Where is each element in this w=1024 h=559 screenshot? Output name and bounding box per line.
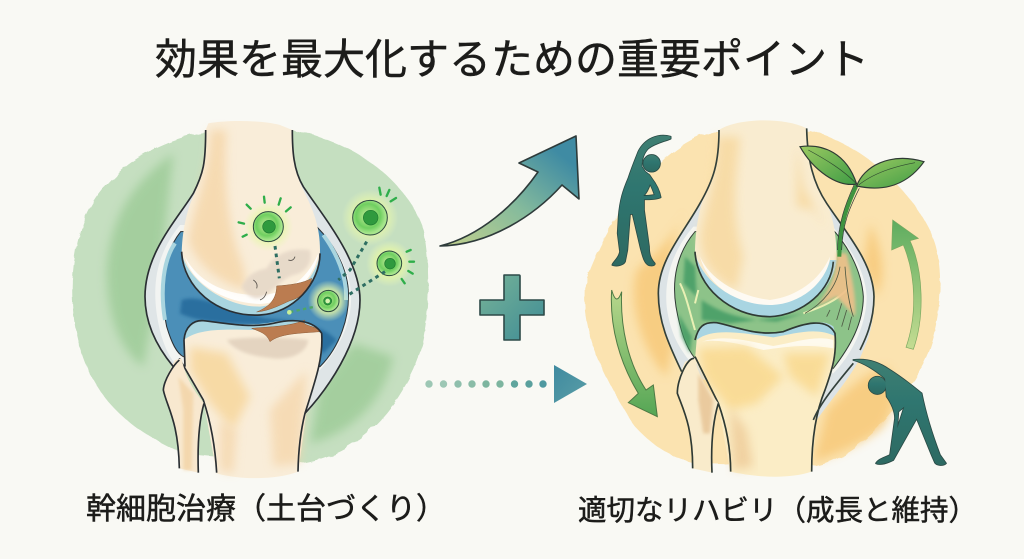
capsule outline <box>658 128 874 420</box>
tibia <box>695 322 836 477</box>
fibula <box>163 358 204 473</box>
label: stem cell therapy: 幹細胞治療（土台づくり） <box>86 493 446 526</box>
synovial fluid <box>163 227 349 367</box>
title: 効果を最大化するための重要ポイント <box>155 36 869 83</box>
joint fluid and capsule fill <box>658 128 874 420</box>
capsule outline <box>145 130 360 413</box>
arrow: upward green <box>892 220 921 349</box>
yellow watercolor blob <box>585 131 940 467</box>
stem cells <box>239 188 414 322</box>
tibia <box>179 320 322 478</box>
left panel: stem cell therapy knee <box>72 121 428 478</box>
fibula <box>677 358 718 473</box>
green watercolor blob <box>72 130 428 463</box>
dotted paths <box>275 242 385 296</box>
figure: standing side stretch <box>612 136 671 266</box>
arrow: downward green <box>611 290 657 417</box>
femur <box>695 120 837 317</box>
label: rehabilitation: 適切なリハビリ（成長と維持） <box>578 495 977 527</box>
dotted arrow <box>425 365 587 403</box>
femur <box>145 121 360 413</box>
plus sign <box>480 275 544 340</box>
sprout with roots <box>800 146 924 330</box>
big curved arrow <box>440 136 579 246</box>
figure: bending side stretch <box>853 360 946 465</box>
right panel: rehabilitation knee <box>585 120 946 477</box>
